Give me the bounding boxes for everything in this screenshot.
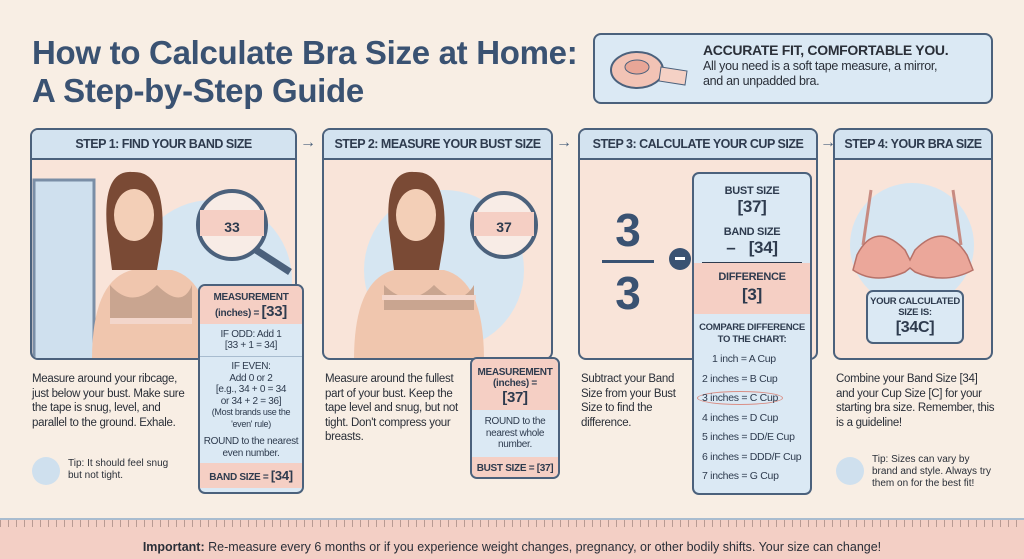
- cup chart box: DIFFERENCE: [718, 271, 786, 283]
- cup chart list: 6 inches = DDD/F Cup: [702, 450, 801, 462]
- calculation box step 1: [33 + 1 = 34]: [225, 340, 277, 351]
- tip 1: Tip: It should feel snug: [68, 458, 168, 469]
- cup chart list: 5 inches = DD/E Cup: [702, 431, 795, 443]
- calculation box step 1: (inches) = [33]: [215, 303, 287, 320]
- intro callout: [593, 33, 993, 104]
- cup chart box: COMPARE DIFFERENCE: [699, 322, 805, 333]
- cup chart list: 3 inches = C Cup: [702, 392, 778, 404]
- illustration: woman measuring band: [32, 172, 292, 358]
- intro text: ACCURATE FIT, COMFORTABLE YOU.: [703, 42, 948, 58]
- cup chart box: BAND SIZE: [724, 226, 780, 238]
- calculation box step 1: Add 0 or 2: [229, 372, 273, 384]
- calculation box step 1: (Most brands use the 'even' rule): [212, 407, 290, 428]
- panel: step 1: STEP 1: FIND YOUR BAND SIZE: [75, 137, 252, 151]
- cup chart box: – [34]: [726, 238, 778, 257]
- illustration: woman measuring bust: [354, 172, 538, 358]
- cup chart list: 1 inch = A Cup: [712, 353, 776, 365]
- big fraction: [602, 204, 654, 319]
- step 1 description: Measure around your ribcage, just below your bust. Make sure the tape is snug, level, and parallel to the ground. Exhale.: [32, 373, 184, 428]
- calculation box step 2: ROUND to the nearest whole number.: [485, 416, 545, 450]
- cup chart box: [3]: [742, 285, 762, 304]
- big fraction: 3 3: [615, 204, 641, 319]
- cup chart list: [697, 353, 802, 482]
- arrow: →: [556, 134, 572, 151]
- panel: step 3: [578, 128, 818, 360]
- calculation box step 2: (inches) =: [493, 378, 537, 389]
- panel: step 4: [833, 128, 993, 360]
- calculation box step 2: MEASUREMENT: [477, 367, 553, 378]
- panel: step 4: STEP 4: YOUR BRA SIZE: [844, 137, 982, 151]
- panel: step 2: [322, 128, 553, 360]
- calculation box step 1: IF ODD: Add 1: [220, 329, 282, 340]
- illustration: woman measuring band: 33: [224, 219, 240, 235]
- cup chart list: 2 inches = B Cup: [702, 372, 777, 384]
- result box: [34C]: [896, 319, 934, 336]
- title: A Step-by-Step Guide: [32, 72, 364, 109]
- illustration: woman measuring bust: 37: [496, 219, 512, 235]
- result box: YOUR CALCULATED: [870, 296, 960, 307]
- calculation box step 1: ROUND to the nearest even number.: [204, 436, 298, 458]
- cup chart box: [692, 172, 812, 495]
- intro text: [703, 42, 948, 88]
- calculation box step 1: MEASUREMENT: [213, 292, 289, 303]
- intro text: All you need is a soft tape measure, a mirror,: [703, 59, 937, 73]
- cup chart list: 7 inches = G Cup: [702, 470, 779, 482]
- bottom ruler banner: [0, 518, 1024, 559]
- calculation box step 2: [37]: [502, 389, 528, 406]
- result box: [866, 290, 964, 344]
- step 4 description: Combine your Band Size [34] and your Cup Size [C] for your starting bra size. Remember, this is a guideline!: [836, 373, 994, 428]
- cup chart box: TO THE CHART:: [718, 334, 786, 345]
- panel: step 2: STEP 2: MEASURE YOUR BUST SIZE: [334, 137, 541, 151]
- calculation box step 1: [198, 284, 304, 494]
- title: How to Calculate Bra Size at Home:: [32, 34, 577, 71]
- cup chart list: 4 inches = D Cup: [702, 412, 778, 424]
- tip 1: but not tight.: [68, 470, 123, 481]
- intro text: and an unpadded bra.: [703, 74, 819, 88]
- tip 1: [32, 457, 168, 485]
- calculation box step 1: or 34 + 2 = 36]: [221, 396, 281, 406]
- icon: tape measure: [610, 51, 688, 89]
- arrow: →: [300, 134, 316, 151]
- cup chart box: [37]: [737, 197, 767, 216]
- result box: SIZE IS:: [898, 307, 932, 318]
- minus icon: [669, 248, 691, 270]
- calculation box step 2: BUST SIZE = [37]: [477, 462, 553, 474]
- cup chart box: BUST SIZE: [725, 185, 779, 197]
- calculation box step 2: [470, 357, 560, 479]
- calculation box step 1: IF EVEN:: [231, 361, 271, 372]
- panel: step 3: STEP 3: CALCULATE YOUR CUP SIZE: [593, 137, 803, 151]
- illustration: bra: [850, 183, 974, 290]
- step 2 description: Measure around the fullest part of your bust. Keep the tape level and snug, but not tight. Don't compress your breasts.: [325, 373, 458, 443]
- bottom ruler banner: Important: Re-measure every 6 months or if you experience weight changes, pregnancy, or other bodily shifts. Your size can change!: [143, 540, 881, 554]
- calculation box step 1: BAND SIZE = [34]: [209, 468, 293, 483]
- title: [32, 34, 577, 109]
- calculation box step 1: [e.g., 34 + 0 = 34: [216, 384, 286, 395]
- tip 4: Tip: Sizes can vary by brand and style. Always try them on for the best fit!: [872, 454, 991, 489]
- step 3 description: Subtract your Band Size from your Bust Size to find the difference.: [581, 373, 676, 428]
- arrow: →: [820, 134, 836, 151]
- panel: step 1: [30, 128, 297, 360]
